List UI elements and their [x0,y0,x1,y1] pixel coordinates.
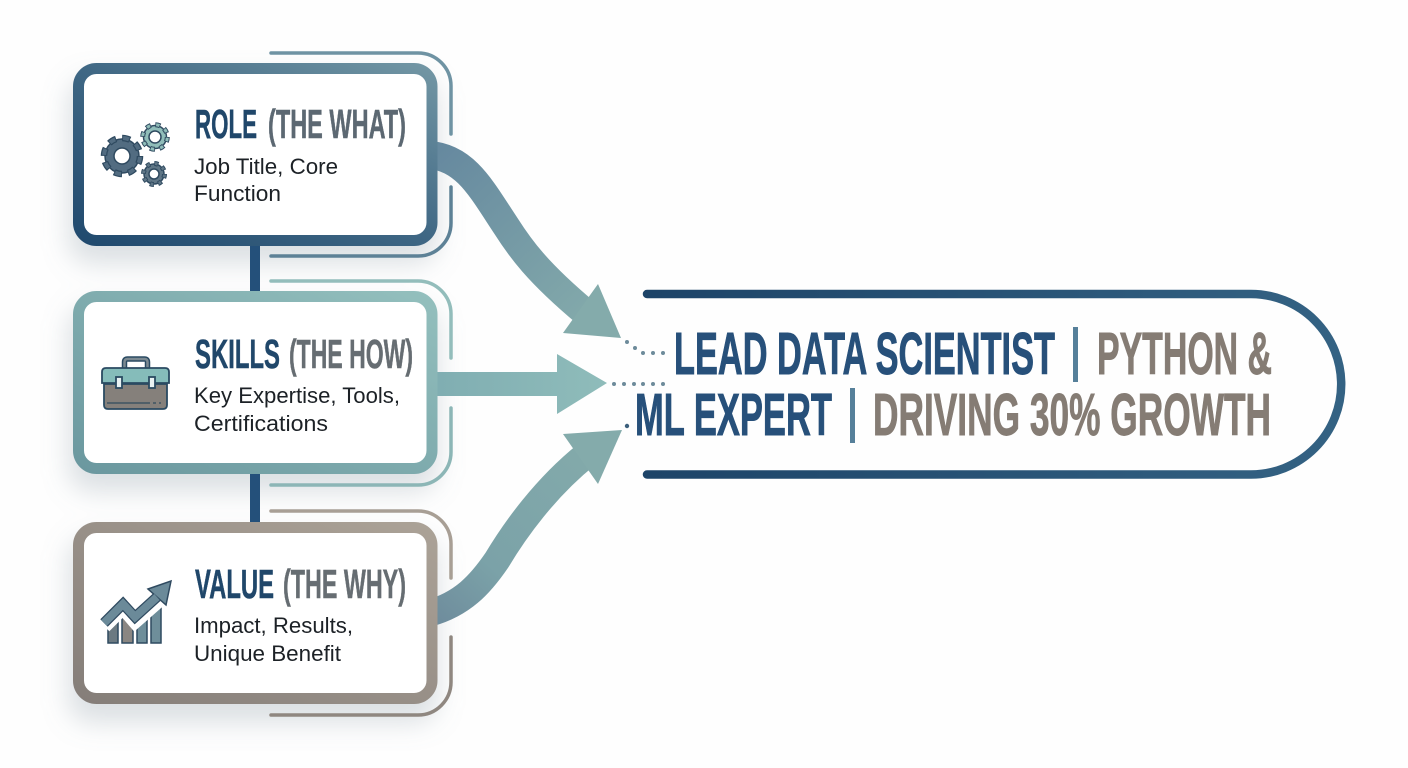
bracket lines: value [271,511,451,715]
text: skills description [194,383,400,436]
heading: the what: (THE WHAT) [268,101,406,147]
bracket lines: skills [271,281,451,485]
text: role description: Function [194,181,281,206]
headline: line 1: PYTHON & [1097,321,1272,387]
arrow: value to headline [430,430,622,613]
arrow: role to headline [430,155,621,338]
headline: line 2: ML EXPERT [635,382,832,448]
heading: value: VALUE [195,561,274,607]
heading: the why: (THE WHY) [283,561,406,607]
icon: toolbox [102,359,169,409]
dotted connectors [612,340,665,428]
card shadows [68,78,438,723]
heading: role: ROLE [195,101,257,147]
icon: gears [104,125,167,184]
text: role description [194,154,338,206]
panel: value [78,528,432,698]
heading: skills: SKILLS [195,331,280,377]
icon: growth chart [104,581,171,643]
connector: role to skills [250,244,260,293]
text: skills description: Key Expertise, Tools, [194,383,400,408]
headline: line 2 [635,382,1271,448]
arrow: skills to headline [436,354,607,414]
text: skills description: Certifications [194,411,328,436]
text: value description: Impact, Results, [194,613,353,638]
bracket lines: role [271,53,451,256]
connector: skills to value [250,472,260,524]
text: value description [194,613,353,666]
heading: the how: (THE HOW) [289,331,413,377]
capsule: headline outline [647,294,1341,474]
text: role description: Job Title, Core [194,154,338,179]
panel: role [78,68,432,240]
panel: skills [78,296,432,468]
text: value description: Unique Benefit [194,641,341,666]
headline: line 1: LEAD DATA SCIENTIST [674,321,1055,387]
